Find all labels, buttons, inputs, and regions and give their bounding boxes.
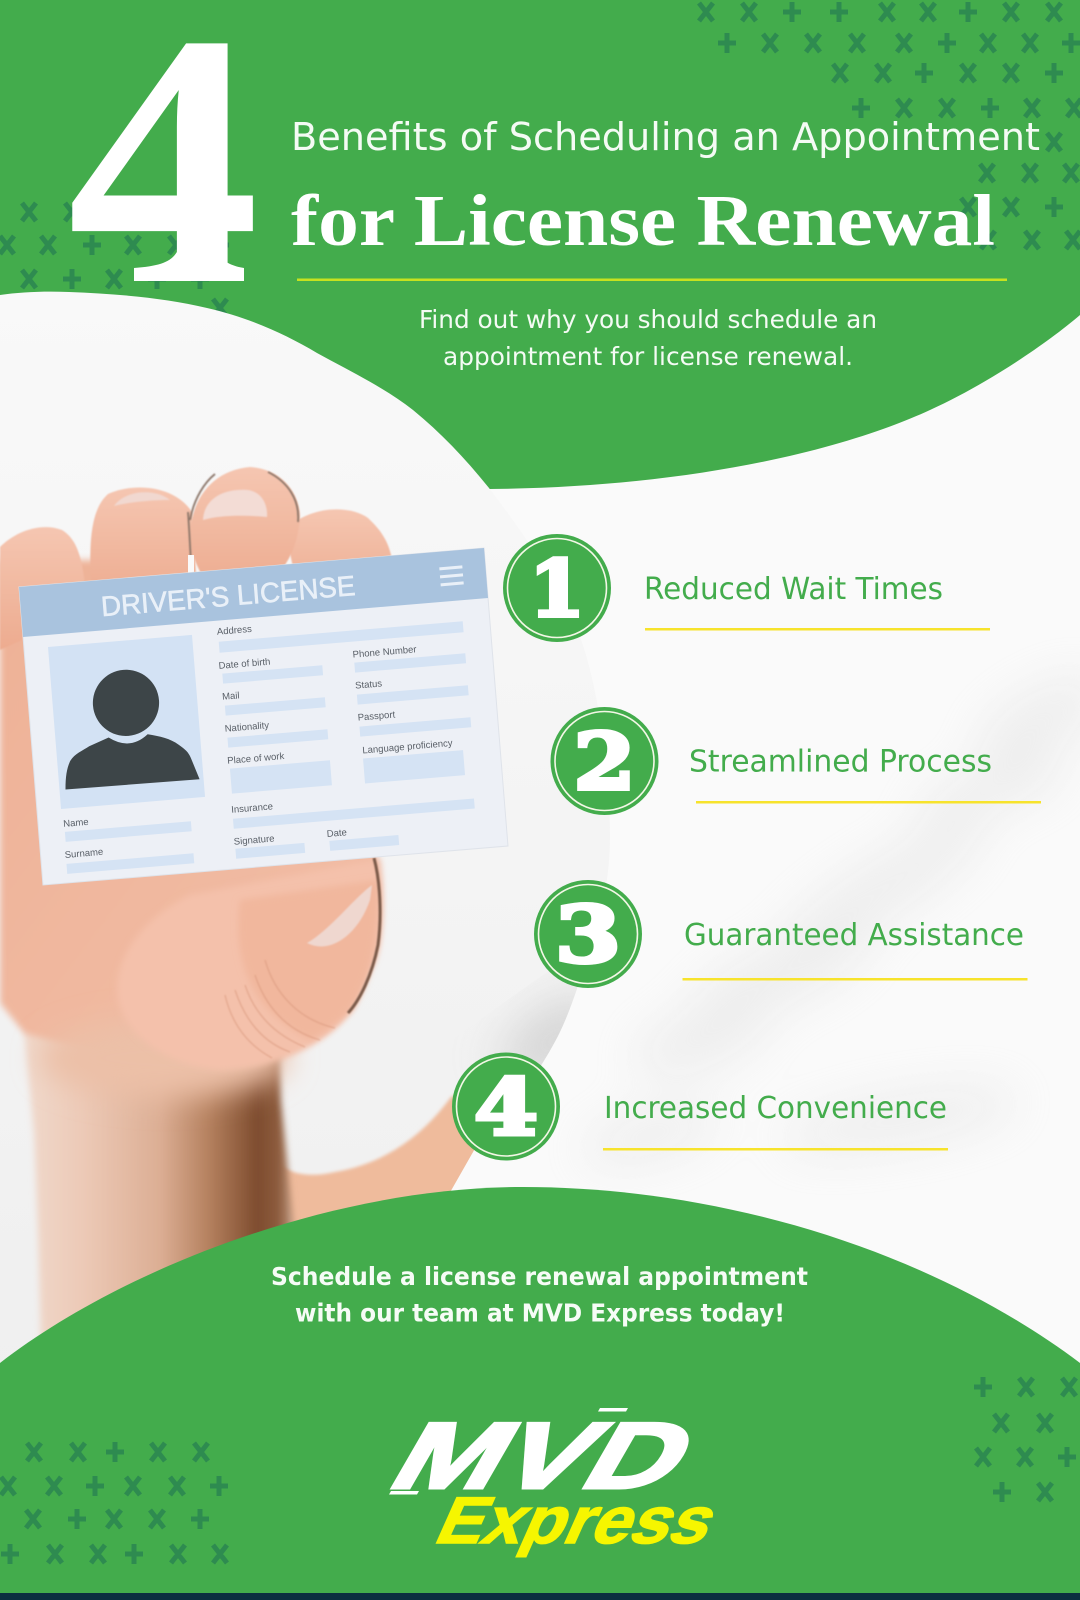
subtitle: Find out why you should schedule an — [419, 305, 877, 334]
underline 1 — [645, 628, 990, 630]
call to action text: with our team at MVD Express today! — [295, 1298, 785, 1328]
card title: DRIVER'S LICENSE — [100, 570, 356, 622]
thumb knuckle shade — [238, 880, 378, 1040]
badge 4 — [452, 1052, 560, 1160]
call to action text: Schedule a license renewal appointment — [271, 1262, 808, 1291]
card field labels: Phone Number — [352, 644, 418, 661]
shadow behind forearm — [495, 986, 577, 1065]
thumb creases — [225, 960, 335, 1058]
bottom navy stripe — [0, 1593, 1080, 1600]
label 4: Increased Convenience — [604, 1091, 947, 1126]
dot pattern: bottom left — [1, 1442, 228, 1564]
benefit 4 — [452, 1052, 948, 1160]
card field labels: Nationality — [224, 720, 270, 735]
finger edge shading — [188, 472, 298, 560]
badge 3: 3 — [555, 890, 621, 981]
photo area — [48, 635, 205, 809]
right finger — [290, 508, 392, 564]
hamburger menu icon — [439, 567, 464, 585]
badge 3 — [534, 880, 642, 988]
MVD Express logo — [372, 1403, 731, 1557]
person silhouette — [56, 664, 200, 790]
card field labels: Date of birth — [218, 657, 271, 672]
dot pattern: bottom right — [974, 1377, 1076, 1502]
label 1: Reduced Wait Times — [644, 572, 943, 607]
subtitle — [419, 305, 877, 371]
dot pattern: top right — [699, 2, 1080, 249]
card header band — [19, 548, 488, 637]
forearm background — [284, 1094, 474, 1222]
card field labels: Signature — [233, 833, 275, 848]
card body — [19, 548, 508, 885]
badge 2 — [550, 707, 658, 815]
logo wordmark Express: Express — [426, 1483, 731, 1557]
card field labels: Language proficiency — [362, 738, 453, 756]
top green header panel — [0, 0, 1080, 489]
badge 2: 2 — [574, 717, 636, 808]
call to action text — [271, 1262, 808, 1328]
underline 4 — [603, 1148, 948, 1150]
blurred background shadows — [577, 661, 1080, 1174]
wrist — [22, 1032, 296, 1335]
card field labels: Passport — [357, 710, 396, 724]
logo wordmark MVD: MVD — [372, 1403, 717, 1508]
thumb — [117, 860, 382, 1070]
title underline — [297, 278, 1007, 281]
badge 1: 1 — [529, 544, 585, 635]
title line 1: Benefits of Scheduling an Appointment — [291, 115, 1040, 159]
left finger — [0, 527, 87, 650]
benefit 2 — [550, 707, 1041, 815]
wrist top blend into palm — [40, 1018, 290, 1098]
thumb edge — [348, 858, 380, 1013]
subtitle: appointment for license renewal. — [443, 342, 853, 371]
nail: middle finger — [203, 490, 267, 520]
bottom green panel — [0, 1187, 1080, 1600]
title line 2: for License Renewal — [291, 180, 995, 261]
nail: ring finger — [114, 492, 170, 506]
large photo circle with hand and license — [0, 292, 578, 1362]
photo: hand holding the card — [0, 467, 621, 1340]
dot pattern: top left — [0, 202, 229, 317]
benefit 3 — [534, 880, 1028, 988]
ring finger — [90, 486, 197, 578]
finger gap — [188, 555, 194, 572]
card form fields — [50, 621, 480, 874]
card field labels: Mail — [222, 690, 240, 703]
badge 4: 4 — [474, 1062, 538, 1154]
badge 1 — [503, 534, 611, 642]
card field labels: Insurance — [231, 801, 273, 816]
photo circle background — [0, 292, 610, 1400]
middle finger — [192, 466, 301, 572]
benefit 1 — [503, 534, 990, 642]
card field labels: Place of work — [227, 751, 285, 767]
label 3: Guaranteed Assistance — [684, 918, 1024, 953]
logo accent stripes — [389, 1408, 628, 1494]
underline 3 — [682, 978, 1028, 980]
card field labels: Surname — [64, 847, 104, 861]
underline 2 — [696, 801, 1041, 804]
thumb nail — [307, 885, 372, 946]
card field labels: Date — [326, 827, 347, 840]
card field labels: Address — [217, 624, 252, 638]
card field labels — [48, 608, 460, 862]
card field labels: Status — [355, 678, 383, 692]
card field labels: Name — [63, 817, 89, 830]
label 2: Streamlined Process — [689, 744, 992, 780]
driver's license card — [19, 548, 508, 885]
palm — [0, 560, 382, 1065]
